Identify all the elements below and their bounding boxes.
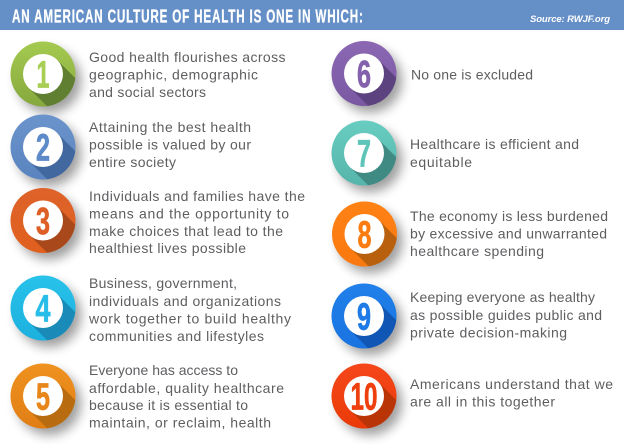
icon: number 8 badge — [332, 202, 409, 280]
text: item 10 — [410, 376, 613, 410]
icon: number 3 badge: 3 — [36, 201, 50, 243]
text: item 3: healthiest lives possible — [89, 240, 246, 256]
text: item 3: Individuals and families have the — [89, 188, 305, 204]
icon: number 10 badge — [332, 364, 408, 442]
icon: number 9 badge: 9 — [357, 296, 371, 338]
text: item 5: Everyone has access to — [89, 362, 238, 378]
text: item 10: are all in this together — [410, 394, 555, 410]
text: item 6: No one is excluded — [411, 66, 533, 82]
text: item 5 — [89, 362, 284, 430]
icon: number 4 badge — [10, 276, 88, 354]
icon: number 9 badge — [332, 284, 408, 362]
icon: number 5 badge — [10, 364, 88, 442]
icon: number 6 badge: 6 — [357, 54, 371, 96]
icon: number 7 badge — [332, 120, 408, 198]
text: item 8 — [410, 208, 608, 259]
text: item 8: healthcare spending — [410, 243, 544, 259]
text: item 4: work together to build healthy — [88, 310, 291, 326]
icon: number 7 badge: 7 — [357, 134, 371, 176]
text: item 3: means and the opportunity to — [89, 206, 289, 222]
icon: number 2 badge: 2 — [36, 128, 50, 170]
text: item 1: geographic, demographic — [89, 66, 258, 82]
text: item 4: Business, government, — [89, 275, 237, 291]
text: item 7: equitable — [410, 154, 472, 170]
source credit: Source: RWJF.org — [530, 14, 610, 25]
text: item 7 — [410, 136, 579, 170]
text: item 9: private decision-making — [410, 324, 567, 340]
icon: number 5 badge: 5 — [36, 376, 50, 418]
title: AN AMERICAN CULTURE OF HEALTH IS ONE IN WHICH: — [12, 7, 363, 27]
text: item 5: maintain, or reclaim, health — [89, 414, 271, 430]
text: item 1: and social sectors — [89, 84, 206, 100]
text: item 4: communities and lifestyles — [89, 328, 264, 344]
icon: number 4 badge: 4 — [36, 288, 50, 330]
text: item 8: The economy is less burdened — [410, 208, 608, 224]
text: item 1 — [89, 49, 286, 100]
header banner — [0, 0, 624, 30]
icon: number 8 badge: 8 — [357, 214, 372, 256]
icon: number 3 badge — [10, 188, 88, 266]
icon: number 1 badge: 1 — [36, 54, 50, 96]
text: item 9: Keeping everyone as healthy — [410, 289, 595, 305]
text: item 10: Americans understand that we — [410, 376, 613, 392]
text: item 8: by excessive and unwarranted — [410, 226, 607, 242]
text: item 9: as possible guides public and — [410, 307, 602, 323]
text: item 2: entire society — [89, 154, 176, 170]
icon: number 6 badge — [332, 41, 408, 119]
text: item 5: affordable, quality healthcare — [89, 380, 284, 396]
text: item 7: Healthcare is efficient and — [410, 136, 579, 152]
text: item 5: because it is essential to — [89, 397, 248, 413]
text: item 2: Attaining the best health — [89, 119, 251, 135]
text: item 4 — [88, 275, 291, 344]
text: item 3: make choices that lead to the — [89, 223, 283, 239]
icon: number 10 badge: 10 — [350, 376, 378, 418]
text: item 4: individuals and organizations — [89, 293, 281, 309]
icon: number 2 badge — [10, 114, 88, 192]
text: item 3 — [89, 188, 305, 256]
text: item 9 — [410, 289, 602, 340]
text: item 2: possible is valued by our — [89, 136, 251, 152]
text: item 1: Good health flourishes across — [89, 49, 286, 65]
icon: number 1 badge — [10, 42, 88, 118]
text: item 2 — [89, 119, 251, 170]
